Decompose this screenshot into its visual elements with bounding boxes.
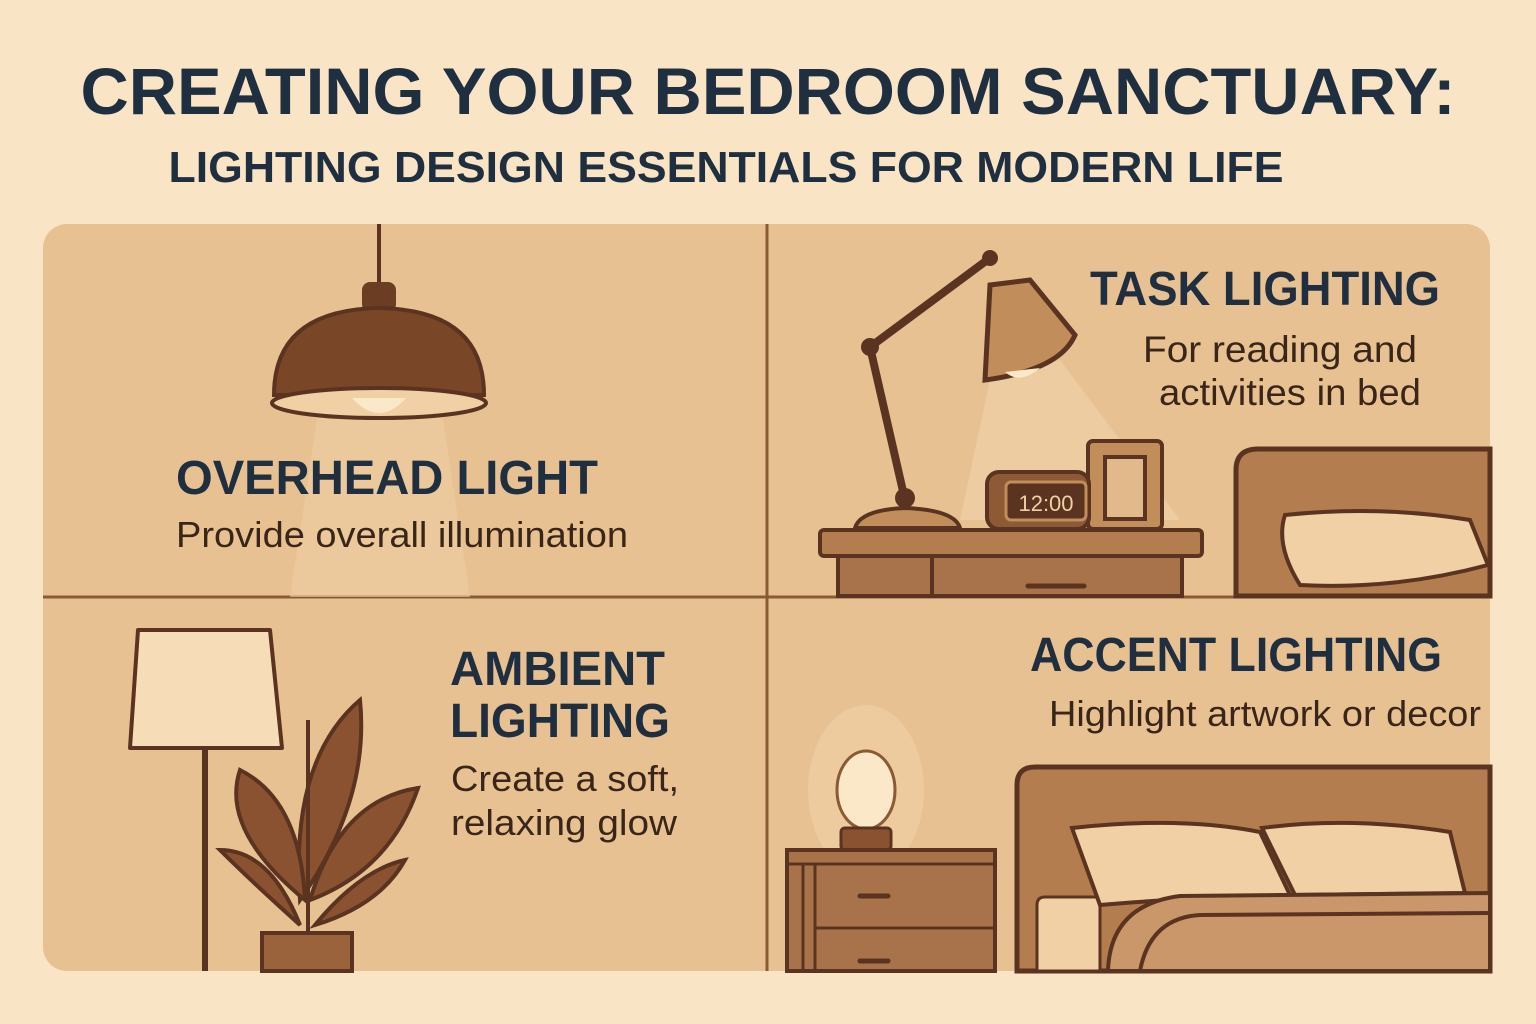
subtitle: LIGHTING DESIGN ESSENTIALS FOR MODERN LIFE — [168, 143, 1284, 192]
icon: pendant lamp — [272, 224, 486, 597]
text: task — [1143, 329, 1421, 413]
heading: task lighting: TASK LIGHTING — [1090, 263, 1440, 316]
panel: ambient lighting — [130, 630, 679, 971]
heading: accent lighting: ACCENT LIGHTING — [1030, 629, 1442, 682]
heading: overhead light: OVERHEAD LIGHT — [176, 452, 598, 505]
panel: accent lighting — [787, 629, 1490, 971]
heading: ambient lighting: LIGHTING — [450, 695, 670, 748]
text: ambient — [451, 758, 679, 843]
icon: desk lamp with nightstand and clock: 12:00 — [1018, 491, 1074, 516]
icon: floor lamp — [130, 630, 282, 971]
heading: ambient lighting — [450, 643, 670, 748]
text: task: For reading and — [1143, 329, 1417, 370]
text: ambient: relaxing glow — [451, 802, 678, 843]
panel: task lighting — [820, 250, 1490, 596]
icon: globe lamp, nightstand, bed — [787, 705, 1490, 971]
title: CREATING YOUR BEDROOM SANCTUARY: — [80, 54, 1455, 128]
text: task: activities in bed — [1159, 372, 1421, 413]
text: accent: Highlight artwork or decor — [1049, 693, 1481, 734]
panel grid — [43, 224, 1490, 971]
icon: plant — [220, 700, 418, 971]
text: ambient: Create a soft, — [451, 758, 679, 799]
text: overhead: Provide overall illumination — [176, 514, 628, 555]
panel: overhead light — [176, 224, 628, 597]
heading: ambient lighting: AMBIENT — [450, 643, 665, 696]
icon: desk lamp with nightstand and clock — [820, 250, 1490, 596]
